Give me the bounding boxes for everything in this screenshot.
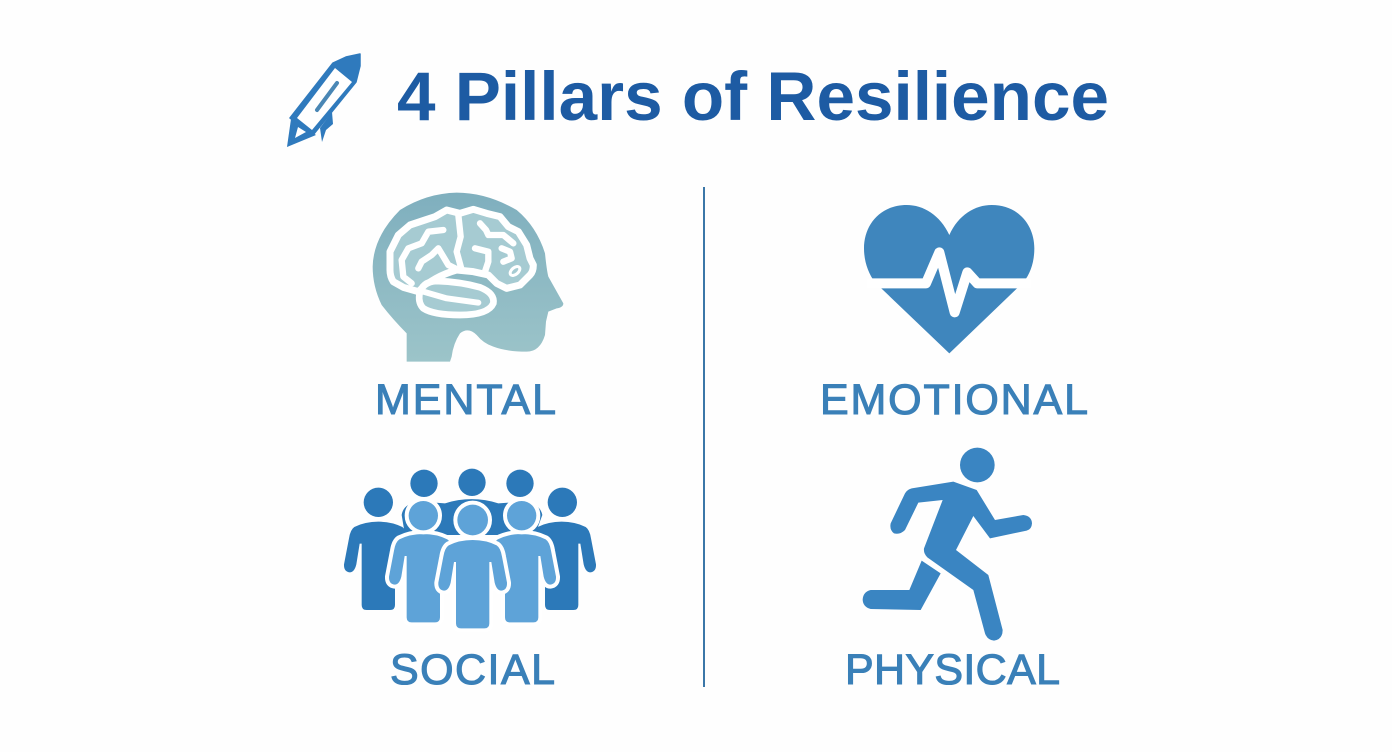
icon: group of people [344,469,596,628]
title: 4 Pillars of Resilience [397,58,1109,135]
icon: running figure [863,448,1032,641]
panel: mental [373,193,563,424]
divider [703,187,705,687]
icon: heart with pulse [864,205,1034,353]
panel: physical [845,448,1060,694]
label: mental: MENTAL [375,376,556,424]
icon: pencil rocket [287,54,360,147]
label: social: SOCIAL [390,646,555,694]
panel: emotional [820,205,1088,424]
label: emotional: EMOTIONAL [820,376,1088,424]
label: physical: PHYSICAL [845,646,1060,694]
icon: brain in head [373,193,563,362]
panel: social [344,469,596,694]
